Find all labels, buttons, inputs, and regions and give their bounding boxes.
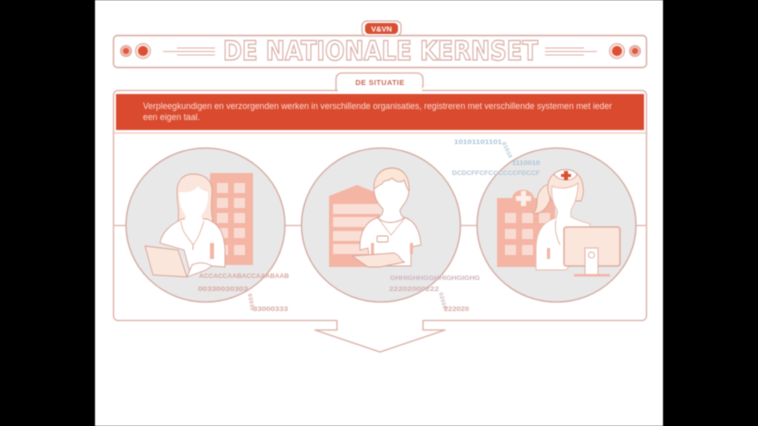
icon: computer monitor: [564, 227, 620, 276]
icon: hospital: [497, 190, 555, 267]
code text 2: 02000: [437, 292, 447, 310]
icon: female nurse: [533, 170, 590, 270]
code text 1: 00330030303: [198, 286, 249, 293]
header banner: [114, 21, 646, 68]
V&VN tab: V&VN: [371, 24, 392, 34]
section tab: de situatie: DE SITUATIE: [355, 78, 405, 87]
connector lines: [114, 224, 646, 226]
code text 1: ACCACCAABACCAAABAAB: [199, 273, 290, 280]
code text 1: 03030: [246, 293, 255, 311]
code text 2: 22202000222: [389, 286, 440, 293]
code text 2: [389, 275, 480, 313]
circle 2: male nurse with tablet: [302, 148, 460, 302]
red intro banner: Verpleegkundigen en verzorgenden werken in verschillende organisaties, registreren met verschillende systemen met ieder: [143, 101, 612, 111]
code text 2: GHHIGHHGGHHIGHGIGHG: [390, 275, 480, 282]
code text 3: 1110010: [512, 160, 541, 167]
left header lines: [163, 48, 215, 55]
code text 2: 222020: [444, 306, 470, 313]
V&VN tab: [362, 21, 401, 36]
right header lines: [545, 48, 597, 55]
code text 3: 01010: [500, 141, 513, 160]
circle 1: woman with laptop: [126, 148, 285, 302]
circle 3: nurse at computer: [477, 148, 636, 302]
code text 1: [198, 273, 290, 313]
main panel with arrow outline: [114, 90, 646, 352]
code text 1: 33000333: [253, 306, 289, 313]
right header dots: [610, 44, 640, 58]
title: DE NATIONALE KERNSET: [223, 36, 539, 67]
red intro banner: een eigen taal.: [143, 112, 200, 122]
icon: clinic building: [329, 185, 380, 267]
red intro banner: [116, 94, 644, 130]
section tab: de situatie: [336, 73, 423, 92]
code text 3: 10101101101: [454, 139, 503, 146]
left header dots: [120, 44, 150, 58]
icon: male nurse: [352, 168, 421, 267]
icon: woman: [145, 174, 225, 277]
code text 3: [452, 139, 541, 177]
icon: office building: [210, 173, 253, 265]
code text 3: DCDCFFCFCCCCCCFDCCF: [452, 170, 540, 177]
